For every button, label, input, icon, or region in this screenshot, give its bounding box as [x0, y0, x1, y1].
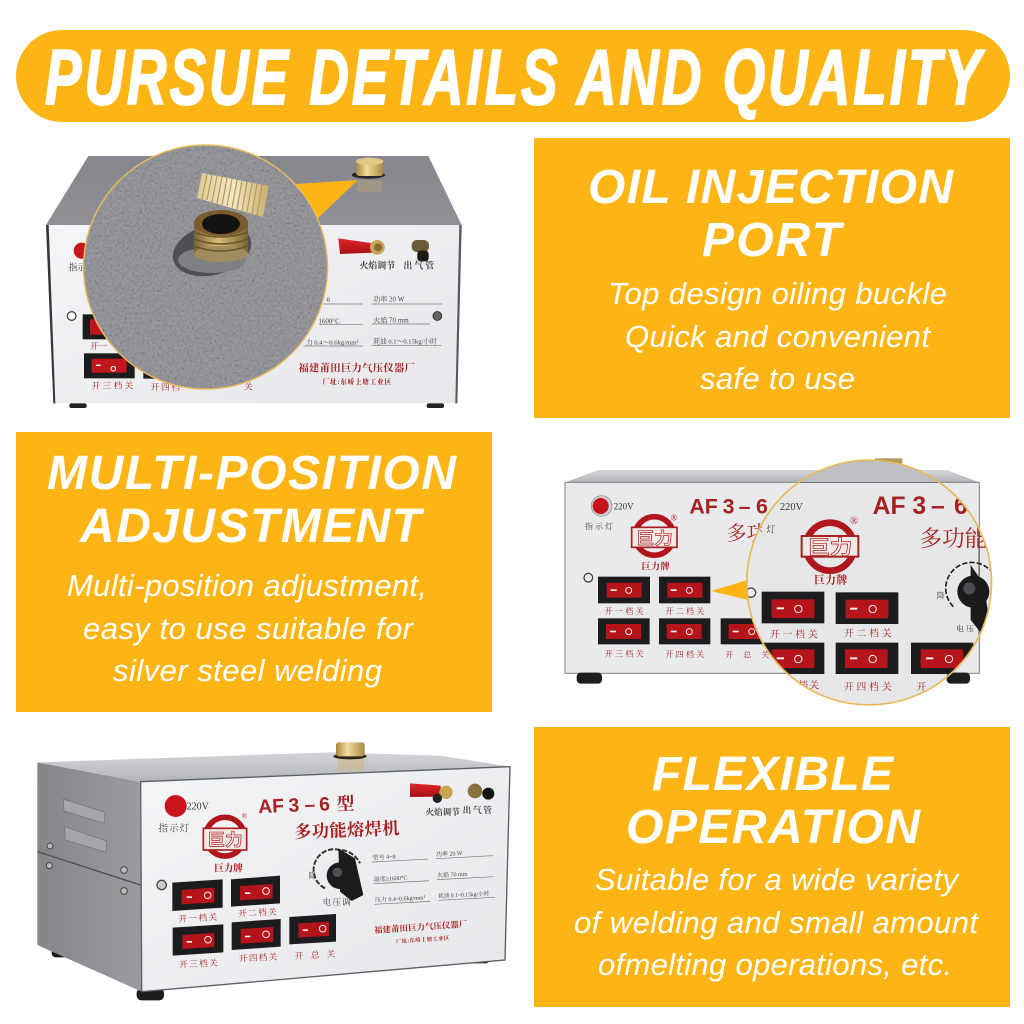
specification lines: 压力 0.4~0.6kg/mm²: [375, 893, 426, 904]
magnified model text: AF: [873, 493, 906, 520]
model text: 6: [756, 494, 768, 518]
panel heading: [588, 161, 954, 267]
panel text: [608, 276, 947, 396]
specification lines: 功率 20 W: [436, 849, 463, 858]
magnified logo: [802, 516, 858, 586]
panel text: easy to use suitable for: [83, 611, 415, 646]
photo: welder three-quarter view: [37, 742, 510, 1000]
manufacturer text: 福建莆田巨力气压仪器厂: [298, 362, 415, 375]
panel text: Suitable for a wide variety: [595, 862, 960, 897]
model text: [258, 792, 400, 843]
specification lines: [303, 295, 442, 347]
model text: 多功能熔焊机: [294, 818, 400, 842]
logo: [203, 811, 248, 875]
panel heading: [47, 447, 457, 553]
logo: ®: [671, 513, 678, 523]
switch labels: 开二档关: [665, 606, 707, 616]
welder body: [565, 470, 979, 684]
magnified knob: [937, 562, 990, 634]
knurled brass cap: [197, 173, 269, 217]
specification lines: 火焰 70 mm: [373, 316, 409, 325]
manufacturer text: 厂址:东峤上塘工业区: [396, 934, 450, 945]
front controls: 出气管: [403, 259, 436, 270]
specification lines: 型号 4~8: [372, 852, 396, 862]
panel text: Quick and convenient: [625, 319, 931, 354]
model text: 6: [319, 794, 331, 816]
indicator lamp: [585, 496, 634, 531]
panel heading: PORT: [702, 214, 845, 267]
voltage knob: 电压调: [323, 896, 352, 907]
magnifier: switches: [743, 457, 997, 709]
model text: AF: [689, 494, 718, 518]
magnified labels: 开二档关: [844, 628, 895, 640]
switch labels: 开四档关: [239, 951, 279, 964]
panel: oil injection port: [534, 138, 1010, 418]
panel heading: MULTI-POSITION: [47, 447, 457, 500]
switch labels: 开三档关: [179, 957, 219, 970]
magnifier: switches: 220V: [780, 502, 803, 513]
panel text: [574, 862, 979, 982]
front controls: 开一: [90, 341, 108, 351]
threaded port: [194, 210, 248, 262]
front controls: 火焰调节: [359, 259, 395, 270]
panel: multi-position adjustment: [16, 432, 492, 712]
front panel: [141, 767, 510, 992]
logo: 巨力: [207, 831, 243, 850]
hole: [172, 230, 252, 276]
model text: –: [739, 494, 751, 518]
voltage knob: 降: [308, 870, 316, 880]
panel heading: FLEXIBLE: [652, 748, 895, 801]
panel heading: [626, 748, 921, 854]
switch labels: 开一档关: [178, 911, 219, 924]
specification lines: [372, 847, 495, 904]
logo: 巨力: [636, 529, 673, 548]
indicator lamp: 指示灯: [158, 823, 190, 835]
title: PURSUE DETAILS AND QUALITY: [45, 34, 985, 121]
magnified labels: 开: [917, 682, 927, 693]
side panel: [37, 762, 142, 992]
magnified model text: 多功能: [919, 527, 987, 552]
panel text: of welding and small amount: [574, 905, 979, 940]
rocker switches: [584, 573, 771, 644]
model text: 3: [288, 796, 300, 817]
specification lines: 耗油 0.1~0.15kg/小时: [438, 889, 490, 900]
voltage knob: [308, 848, 363, 907]
logo: 巨力牌: [641, 560, 670, 571]
manufacturer text: 厂址:东峤上塘工业区: [323, 377, 391, 386]
flame lever and outlet: 火焰调节: [425, 806, 460, 817]
magnified logo: 巨力牌: [814, 573, 848, 586]
rocker switches: [157, 876, 336, 956]
specification lines: 1600°C: [318, 317, 340, 325]
magnified knob: 降: [937, 590, 945, 600]
magnified labels: 开四档关: [844, 681, 895, 693]
magnified switches: [746, 588, 973, 674]
magnified labels: [770, 628, 927, 693]
panel heading: OPERATION: [626, 801, 921, 854]
panel: flexible operation: [534, 727, 1010, 1007]
panel heading: OIL INJECTION: [588, 161, 954, 214]
flame lever and outlet: 出气管: [463, 804, 494, 815]
panel text: [67, 568, 427, 688]
magnified model text: –: [931, 493, 945, 520]
logo: [632, 513, 678, 571]
panel text: Multi-position adjustment,: [67, 568, 427, 603]
callout arrow: oil port: [296, 180, 358, 218]
manufacturer text: 福建莆田巨力气压仪器厂: [374, 919, 468, 935]
top face and brass cap: [37, 742, 510, 782]
switch labels: 开一档关: [605, 606, 646, 616]
switch labels: 开二档关: [238, 906, 278, 919]
model text: 3: [723, 494, 735, 518]
callout arrow: switches: [711, 580, 751, 601]
magnified model text: [873, 496, 986, 548]
magnifier: switches: 示灯: [753, 524, 779, 535]
heading banner: [16, 30, 1010, 122]
switch labels: [178, 906, 343, 970]
welder body: [46, 156, 462, 408]
magnified labels: 档关: [798, 680, 820, 692]
specification lines: 温度≥1600°C: [374, 874, 408, 883]
specification lines: 8: [327, 297, 331, 304]
indicator lamp: [158, 795, 210, 835]
specification lines: 功率 20 W: [373, 295, 405, 304]
panel heading: ADJUSTMENT: [79, 500, 425, 553]
photo: welder front with switch magnifier: [565, 457, 997, 709]
switch labels: [605, 606, 779, 659]
model text: [689, 494, 787, 545]
magnified knob: 电压: [956, 624, 976, 634]
front controls: [67, 238, 436, 392]
logo: ®: [242, 811, 248, 820]
panel text: ofmelting operations, etc.: [598, 947, 952, 982]
manufacturer text: [298, 362, 415, 386]
panel text: Top design oiling buckle: [608, 276, 947, 311]
switch labels: 开四档关: [665, 649, 707, 659]
specification lines: 火焰 70 mm: [437, 870, 468, 879]
indicator lamp: 220V: [187, 802, 210, 813]
magnified model text: 6: [954, 493, 968, 520]
model text: –: [304, 795, 316, 816]
specification lines: 力 0.4～0.6kg/mm²: [306, 338, 358, 347]
model text: 多功能: [727, 522, 787, 545]
front controls: 指示: [68, 262, 87, 273]
photo: welder front with oil port magnifier: [46, 156, 462, 408]
front controls: 开四档: [151, 381, 182, 392]
switch labels: 开总关: [295, 947, 343, 961]
oil cap: [352, 158, 385, 192]
indicator lamp: 220V: [614, 502, 634, 512]
panel text: silver steel welding: [113, 653, 382, 688]
indicator lamp: 指示灯: [585, 521, 615, 531]
magnified model text: 3: [912, 493, 926, 520]
magnified logo: ®: [850, 516, 858, 527]
logo: 巨力牌: [214, 863, 243, 875]
magnified labels: 开一档关: [770, 628, 821, 640]
model text: 型: [336, 793, 355, 814]
switch labels: 开总关: [725, 649, 779, 659]
model text: AF: [258, 796, 285, 818]
front controls: 开三档关: [92, 380, 136, 391]
front controls: 关: [244, 380, 253, 391]
feet: [52, 947, 490, 1000]
flame lever and outlet: [410, 783, 494, 817]
manufacturer text: [374, 919, 468, 947]
magnified logo: 巨力: [807, 537, 852, 559]
magnifier: oil injection port: [80, 142, 332, 394]
panel text: safe to use: [700, 361, 855, 396]
specification lines: 耗油 0.1～0.15kg/小时: [373, 336, 437, 345]
switch labels: 开三档关: [605, 649, 646, 659]
